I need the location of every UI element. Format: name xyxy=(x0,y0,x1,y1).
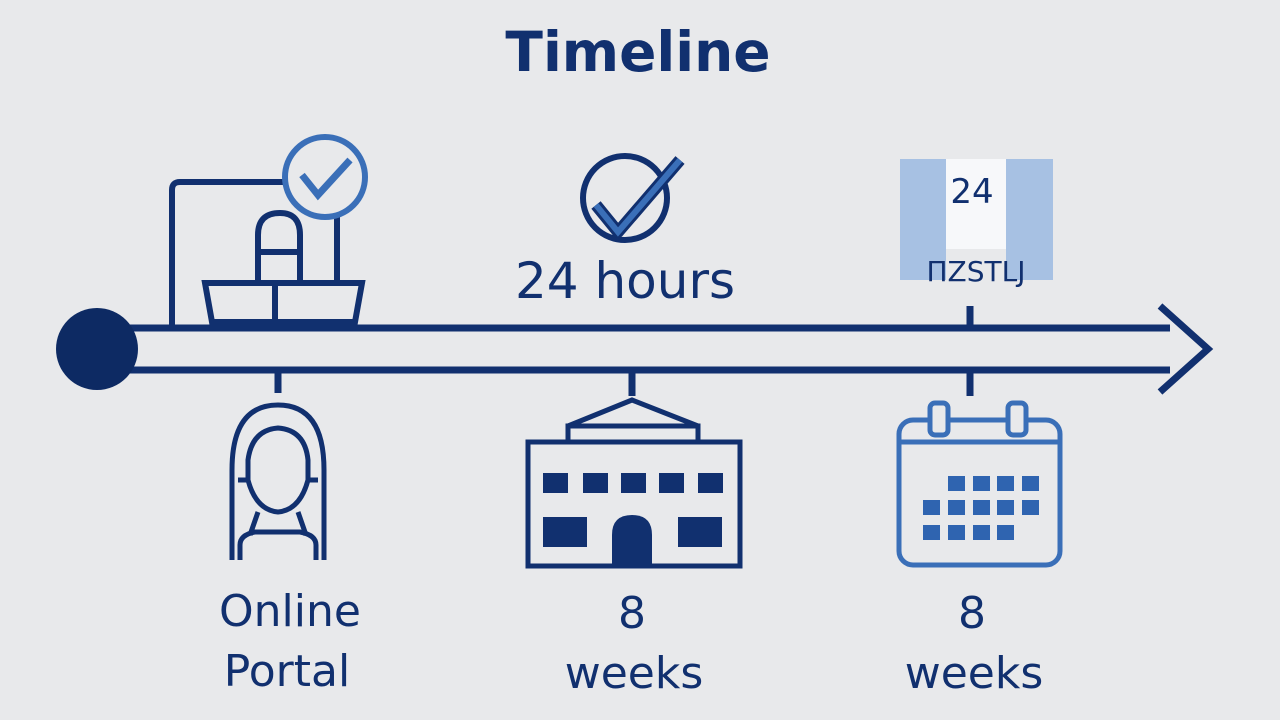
icon: calendar card 24: 24 xyxy=(950,172,994,212)
label: 24 hours: 24 hours xyxy=(515,252,735,310)
text: weeks xyxy=(905,648,1043,699)
icon: calendar card 24 xyxy=(900,159,1053,288)
icon: checkmark 24 hours xyxy=(583,156,680,240)
start dot xyxy=(56,308,138,390)
icon: calendar card 24: ΠZSTLJ xyxy=(927,255,1025,288)
icon: online portal laptop xyxy=(172,137,365,325)
text: Portal xyxy=(224,646,350,697)
title: Timeline xyxy=(505,20,771,84)
label: online portal: Online xyxy=(219,586,361,637)
text: weeks xyxy=(565,648,703,699)
icon: calendar xyxy=(899,403,1060,565)
label: 8 weeks: 8 xyxy=(618,588,646,639)
label: 8 weeks right: 8 xyxy=(958,588,986,639)
icon: person xyxy=(232,405,324,560)
timeline arrow xyxy=(95,306,1208,396)
icon: building xyxy=(528,400,740,566)
